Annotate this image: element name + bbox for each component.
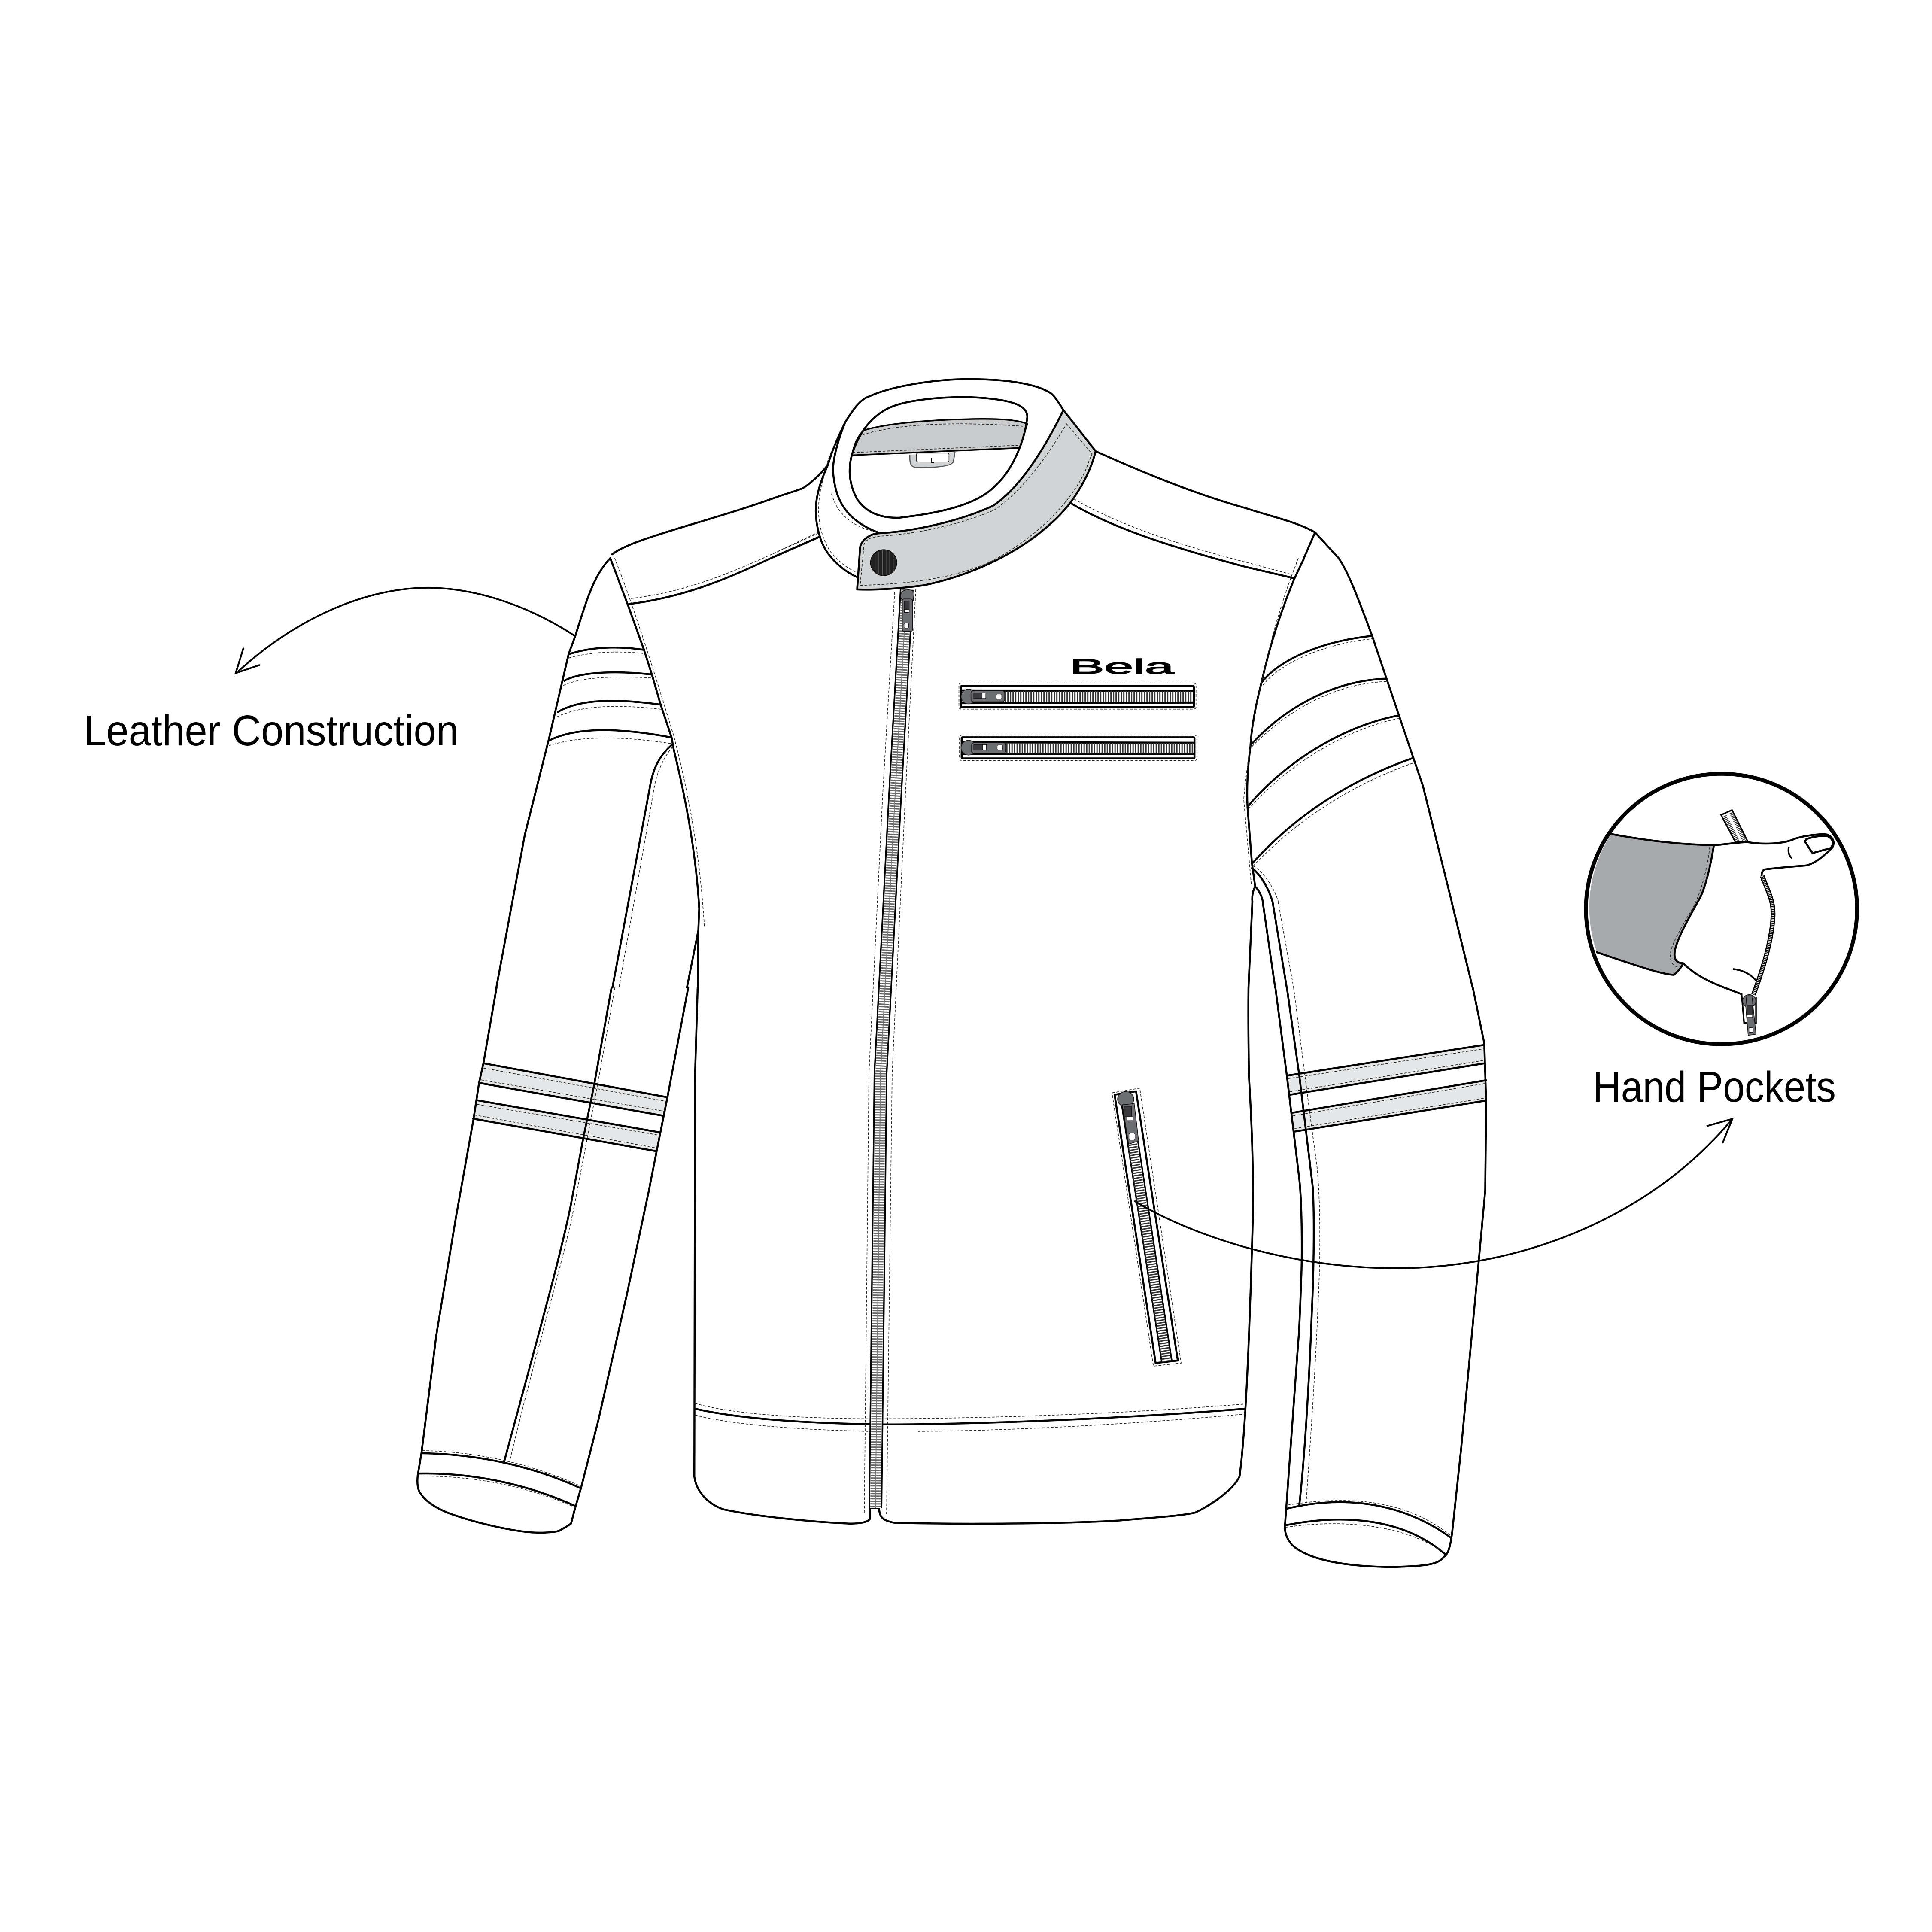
chest zipper lower: [960, 735, 1197, 761]
collar: [773, 379, 1096, 589]
arrow: to Leather Construction label: [236, 588, 575, 673]
size tag: [910, 452, 955, 468]
left sleeve: [417, 558, 705, 1533]
right sleeve: [1244, 532, 1486, 1567]
hand: [1714, 834, 1834, 881]
hand pocket zipper: [1112, 1088, 1181, 1366]
zipper tape behind thumb: [1721, 810, 1748, 842]
grey sleeve: [1589, 834, 1714, 975]
inset: hand pocket detail: [1586, 774, 1857, 1044]
zipper pull: [901, 590, 914, 632]
jacket body: [612, 451, 1315, 1524]
arrow: hand pocket to inset: [1134, 1119, 1732, 1268]
collar snap button: [870, 550, 897, 576]
collar flap: [857, 410, 1096, 589]
open pocket zipper: [1742, 876, 1773, 1036]
brand logo: Bela: [1069, 656, 1174, 678]
inset circle: [1586, 774, 1857, 1044]
size label letter: L: [930, 456, 934, 465]
collar back lining: [852, 419, 1027, 455]
collar outer ring: [845, 379, 1063, 422]
main front zipper: [864, 589, 916, 1514]
label: Leather Construction: Leather Construction: [84, 707, 459, 755]
jacket illustration: [417, 379, 1486, 1567]
chest zipper upper: [959, 683, 1196, 709]
label: Hand Pockets: Hand Pockets: [1593, 1063, 1836, 1111]
collar opening: [850, 397, 1027, 518]
